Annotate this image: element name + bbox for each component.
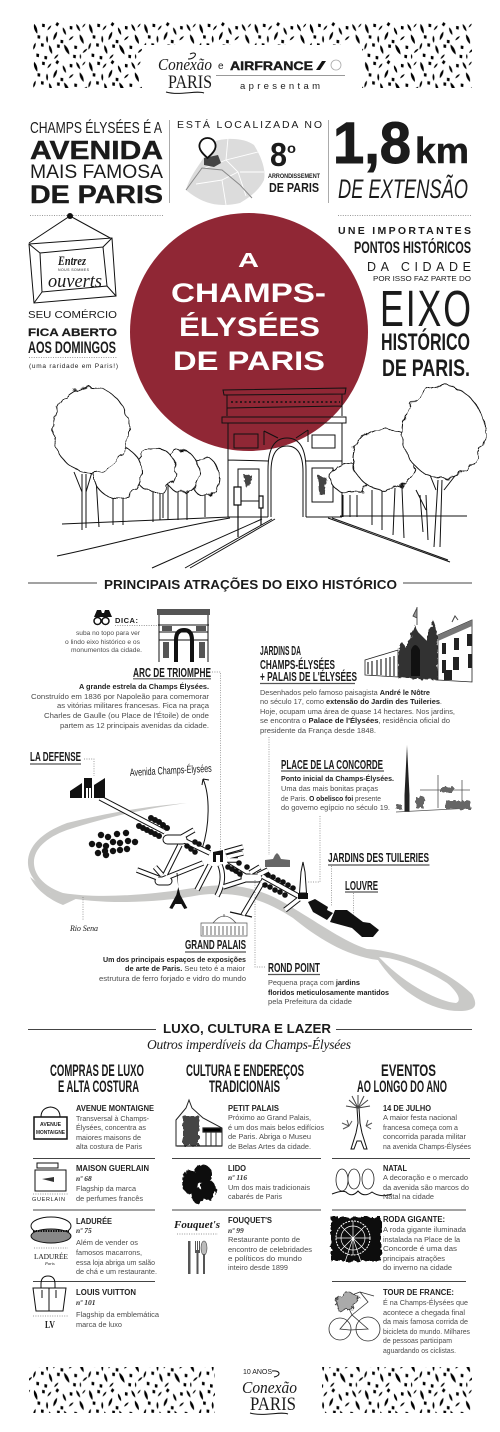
heading: Jardins des Tuileries: JARDINS DES TUILERIES xyxy=(328,850,429,865)
icon: hanging shop sign: NOUS SOMMES xyxy=(58,268,90,272)
heading xyxy=(357,1061,447,1096)
item: Louis Vuitton: Flagship da emblemática xyxy=(76,1310,160,1319)
text: comércio aos domingos xyxy=(28,308,118,370)
text: eixo histórico: DA CIDADE xyxy=(367,260,471,274)
title: CHAMPS- xyxy=(171,278,326,308)
stat: avenida mais famosa xyxy=(30,118,163,209)
title circle xyxy=(130,213,368,451)
column 1: compras de luxo xyxy=(31,1061,160,1331)
icon: Ladurée macaron: LADURÉE xyxy=(34,1251,68,1261)
heading: COMPRAS DE LUXO xyxy=(50,1061,144,1080)
heading: CULTURA E ENDEREÇOS xyxy=(186,1061,304,1080)
text: eixo histórico: DE PARIS. xyxy=(382,355,470,382)
text: Jardins da Champs-Élysées xyxy=(260,644,455,735)
text: Rond Point: ROND POINT xyxy=(268,960,320,975)
icon: hanging shop sign xyxy=(29,213,116,303)
item: Avenue Montaigne xyxy=(76,1104,154,1151)
text: Rond Point: Pequena praça com jardins xyxy=(268,978,360,987)
stat: localização 8º xyxy=(177,118,322,205)
lamp posts xyxy=(234,487,263,537)
icon: Fouquet's and cutlery xyxy=(173,1219,220,1274)
item: Louis Vuitton: nº 101 xyxy=(76,1298,96,1307)
text: Grand Palais: de arte de Paris. Seu teto é a maior xyxy=(125,964,245,973)
column 2: cultura e endereços xyxy=(172,1061,324,1274)
river label xyxy=(69,897,98,933)
text: Jardins da Champs-Élysées: no século 17, como extensão do Jardin des Tuileries. xyxy=(260,697,442,706)
item: Fouquet's: encontro de celebridades xyxy=(228,1245,312,1254)
icon: Ladurée macaron: Paris xyxy=(44,1261,55,1266)
text: Rond Point: floridos meticulosamente mantidos xyxy=(268,988,389,997)
tip: dica: DICA: xyxy=(115,616,138,625)
text: Grand Palais: Um dos principais espaços de exposições xyxy=(103,955,246,964)
item: Lido: Um dos mais tradicionais xyxy=(228,1183,310,1192)
horizon and ground lines xyxy=(57,516,467,568)
title: ÉLYSÉES xyxy=(179,311,320,342)
illustration: Grand Palais xyxy=(201,914,247,936)
stat: avenida mais famosa: CHAMPS ÉLYSÉES É A xyxy=(30,118,162,137)
item: Roda gigante: RODA GIGANTE: xyxy=(383,1215,445,1224)
icon: Eiffel tower xyxy=(169,873,187,909)
item: Tour de France: É na Champs-Élysées que xyxy=(383,1298,468,1307)
heading: Louvre xyxy=(345,879,378,893)
illustration: trees and Arc de Triomphe xyxy=(53,386,484,568)
item: Louis Vuitton: LOUIS VUITTON xyxy=(76,1288,136,1297)
text: Jardins da Champs-Élysées: + PALAIS DE L'ÉLYSÉES xyxy=(260,669,357,684)
text: Jardins da Champs-Élysées: presidente da França desde 1848. xyxy=(260,726,376,735)
item: Roda gigante: do inverno na cidade xyxy=(383,1263,452,1272)
text: Arc de Triomphe: Construído em 1836 por Napoleão para comemorar xyxy=(31,692,209,701)
section heading: luxo, cultura e lazer xyxy=(28,1022,472,1052)
icon: Louis Vuitton bag: LV xyxy=(45,1319,55,1331)
text: Arc de Triomphe xyxy=(31,665,211,730)
text: Place de la Concorde: do governo egípcio no século 19. xyxy=(281,803,390,812)
icon: hanging shop sign: Entrez xyxy=(57,253,87,268)
item: Lido xyxy=(228,1164,310,1201)
section heading: principais atrações: PRINCIPAIS ATRAÇÕES DO EIXO HISTÓRICO xyxy=(104,577,397,592)
heading: La Defense xyxy=(30,749,81,764)
icon: street sign: MONTAIGNE xyxy=(36,1130,65,1136)
stat: 1,8 km de extensão: 1,8 xyxy=(333,111,411,176)
item: Fouquet's: FOUQUET'S xyxy=(228,1216,272,1225)
stat: 1,8 km de extensão xyxy=(333,111,469,204)
item: Natal: NATAL xyxy=(383,1164,407,1173)
column 3: eventos xyxy=(329,1061,471,1355)
logo: Air France xyxy=(230,60,341,73)
item: 14 de Julho xyxy=(383,1104,471,1151)
text: eixo histórico: UNE IMPORTANTES xyxy=(338,225,471,237)
section heading: luxo, cultura e lazer: Outros imperdíveis da Champs-Élysées xyxy=(147,1037,351,1052)
item: Maison Guerlain: de perfumes francês xyxy=(76,1194,143,1203)
item: Fouquet's: nº 99 xyxy=(228,1226,244,1235)
item: Maison Guerlain: Flagship da marca xyxy=(76,1184,137,1193)
item: Ladurée: Além de vender os xyxy=(76,1238,138,1247)
item: Ladurée: LADURÉE xyxy=(76,1217,112,1226)
heading xyxy=(50,1061,144,1096)
icon: obelisk on map xyxy=(298,862,308,899)
item: Tour de France xyxy=(383,1288,470,1355)
heading: E ALTA COSTURA xyxy=(58,1077,139,1096)
icon: Arc on map xyxy=(213,850,223,862)
right trees xyxy=(330,386,484,547)
central pavilion xyxy=(398,620,438,680)
text: Grand Palais: estrutura de ferro forjado e vidro do mundo xyxy=(99,974,246,983)
item: Fouquet's: inteiro desde 1899 xyxy=(228,1263,288,1272)
text: Grand Palais xyxy=(99,937,246,983)
tip: dica: o lindo eixo histórico e os xyxy=(65,639,141,646)
icon: binoculars xyxy=(94,610,112,624)
item: Fouquet's xyxy=(228,1216,312,1272)
item: Natal: Natal na cidade xyxy=(383,1192,434,1201)
icon: Guerlain perfume: GUERLAIN xyxy=(32,1197,65,1203)
footer logo: Conexão xyxy=(242,1378,297,1397)
item: Ladurée: nº 75 xyxy=(76,1226,92,1235)
item: Fouquet's: Restaurante ponto de xyxy=(228,1235,300,1244)
item: Tour de France: de pessoas participam xyxy=(383,1336,452,1345)
item: Tour de France: da mais famosa corrida de xyxy=(383,1317,468,1326)
text: eixo histórico xyxy=(338,225,472,382)
header logos xyxy=(158,53,345,93)
Louvre xyxy=(308,899,379,937)
title: DE PARIS xyxy=(173,346,325,376)
text: Arc de Triomphe: as vitórias militares francesas. Fica na praça xyxy=(57,701,210,710)
illustration: obelisk and Place de la Concorde xyxy=(396,745,472,812)
map pin xyxy=(199,138,216,158)
icon: Eiffel tower with fireworks xyxy=(342,1095,372,1149)
text: Jardins da Champs-Élysées: Hoje, ocupam uma área de quase 14 hectares. Nos jardins, xyxy=(260,707,455,716)
stat: avenida mais famosa: DE PARIS xyxy=(30,181,163,209)
icon: Ladurée macaron xyxy=(31,1217,71,1266)
label: Avenida Champs-Élysées: Avenida Champs-Élysées xyxy=(129,762,212,779)
icon: Fouquet's and cutlery: Fouquet's xyxy=(173,1219,220,1231)
river label: Rio Sena xyxy=(69,924,98,933)
item: Ladurée xyxy=(76,1217,157,1276)
logo: Conexão Paris: PARIS xyxy=(168,72,212,93)
icon: La Defense towers xyxy=(70,778,105,798)
footer logo xyxy=(242,1369,297,1415)
text: Arc de Triomphe: Charles de Gaulle (ou Place de l'Étoile) de onde xyxy=(44,711,209,720)
tip: dica: monumentos da cidade. xyxy=(71,647,142,654)
header leaf pattern xyxy=(32,22,472,88)
text: Arc de Triomphe: ARC DE TRIOMPHE xyxy=(133,665,211,680)
item: Fouquet's: e políticos do mundo xyxy=(228,1254,302,1263)
text: eixo histórico: POR ISSO FAZ PARTE DO xyxy=(373,276,472,283)
text: Jardins da Champs-Élysées: se encontra o Palace de l'Élysées, residência oficial do xyxy=(260,716,450,725)
text: Grand Palais: GRAND PALAIS xyxy=(185,937,246,952)
item: Petit Palais: PETIT PALAIS xyxy=(228,1104,279,1113)
text: Place de la Concorde: Ponto inicial da Champs-Élysées. xyxy=(281,774,394,783)
heading: TRADICIONAIS xyxy=(209,1077,280,1096)
logo: Air France: AIRFRANCE xyxy=(230,61,313,73)
tree clusters xyxy=(89,815,296,898)
icon: small palace xyxy=(265,853,290,867)
item: Ladurée: de chá e um restaurante. xyxy=(76,1267,157,1276)
item: Natal: A decoração e o mercado xyxy=(383,1173,468,1182)
text: Rond Point xyxy=(268,960,389,1006)
text: comércio aos domingos: AOS DOMINGOS xyxy=(28,338,116,357)
rule and apresentam xyxy=(216,76,345,92)
stat: 1,8 km de extensão: km xyxy=(415,130,469,171)
item: Louis Vuitton: marca de luxo xyxy=(76,1320,122,1329)
text: e: e xyxy=(218,61,224,72)
item: Ladurée: famosos macarrons, xyxy=(76,1248,142,1257)
item: Lido: LIDO xyxy=(228,1164,246,1173)
footer leaf pattern xyxy=(29,1367,472,1413)
text: Jardins da Champs-Élysées: CHAMPS-ÉLYSÉES xyxy=(260,657,335,672)
item: Petit Palais: de Paris. Abriga o Museu xyxy=(228,1132,311,1141)
item: Petit Palais xyxy=(228,1104,324,1151)
icon: street sign: AVENUE xyxy=(40,1122,61,1128)
text: Place de la Concorde: Uma das mais bonitas praças xyxy=(281,784,378,793)
heading: Jardins des Tuileries xyxy=(328,850,430,865)
heading: La Defense: LA DEFENSE xyxy=(30,749,81,764)
right wing xyxy=(438,620,472,682)
text: Arc de Triomphe: A grande estrela da Champs Élysées. xyxy=(79,682,209,691)
text: Arc de Triomphe: partem as 12 principais avenidas da cidade. xyxy=(60,721,209,730)
text: comércio aos domingos: SEU COMÉRCIO xyxy=(28,308,117,321)
item: Tour de France: TOUR DE FRANCE: xyxy=(383,1288,454,1297)
footer logo: 10 ANOS xyxy=(243,1369,272,1376)
icon: Louis Vuitton bag xyxy=(33,1276,68,1331)
title: A xyxy=(238,250,259,272)
logo: Conexão Paris xyxy=(158,53,212,93)
item: Avenue Montaigne: alta costura de Paris xyxy=(76,1142,142,1151)
item: Avenue Montaigne: maiores maisons de xyxy=(76,1133,141,1142)
text: Place de la Concorde: de Paris. O obelisco foi presente xyxy=(281,794,381,803)
stat: localização 8º: ARRONDISSEMENT xyxy=(268,173,320,180)
item: Petit Palais: Próximo ao Grand Palais, xyxy=(228,1113,311,1122)
text: Place de la Concorde: PLACE DE LA CONCORDE xyxy=(281,757,383,772)
logo: Conexão Paris: Conexão xyxy=(158,55,212,74)
item: Lido: cabarés de Paris xyxy=(228,1192,282,1201)
river Seine xyxy=(28,803,475,1011)
icon: Guerlain perfume xyxy=(32,1163,68,1203)
item: Roda gigante: principais atrações xyxy=(383,1254,445,1263)
Arc de Triomphe xyxy=(222,388,346,537)
text: Jardins da Champs-Élysées: JARDINS DA xyxy=(260,644,301,658)
icon: Petit Palais xyxy=(176,1100,222,1146)
item: 14 de Julho: 14 DE JULHO xyxy=(383,1104,431,1113)
item: Avenue Montaigne: Élysées, concentra as xyxy=(76,1123,146,1132)
map: eixo histórico xyxy=(28,778,475,1011)
item: Petit Palais: é um dos mais belos edifícios xyxy=(228,1123,324,1132)
text: Jardins da Champs-Élysées: Desenhados pelo famoso paisagista André le Nôtre xyxy=(260,688,430,697)
item: 14 de Julho: concorrida parada militar xyxy=(383,1132,466,1141)
item: Tour de France: aguardando os ciclistas. xyxy=(383,1346,456,1355)
item: Tour de France: acontece a chegada final xyxy=(383,1308,465,1317)
item: Roda gigante: A roda gigante iluminada xyxy=(383,1225,467,1234)
item: Roda gigante: instalada na Place de la xyxy=(383,1235,461,1244)
item: Roda gigante xyxy=(383,1215,467,1272)
tip: dica xyxy=(65,610,157,654)
item: 14 de Julho: na avenida Champs-Élysées xyxy=(383,1142,471,1151)
illustration: Palais de l'Élysée xyxy=(365,607,472,682)
item: Maison Guerlain xyxy=(76,1164,149,1203)
text: eixo histórico: EIXO xyxy=(380,281,471,338)
text: comércio aos domingos: FICA ABERTO xyxy=(28,327,118,339)
icon: street sign xyxy=(34,1107,67,1139)
heading: Louvre: LOUVRE xyxy=(345,879,378,893)
illustration: small arc xyxy=(157,609,210,662)
icon: Lido cabaret xyxy=(182,1165,216,1204)
stat: localização 8º: DE PARIS xyxy=(269,180,319,195)
arrow: avenida pointer xyxy=(202,779,209,849)
section heading: luxo, cultura e lazer: LUXO, CULTURA E LAZER xyxy=(163,1022,331,1036)
item: Avenue Montaigne: Transversal à Champs- xyxy=(76,1114,149,1123)
rule and apresentam: apresentam xyxy=(240,81,320,92)
item: Maison Guerlain: nº 68 xyxy=(76,1174,92,1183)
roads xyxy=(100,798,300,917)
left wing xyxy=(365,650,398,677)
icon: cyclist xyxy=(329,1292,380,1341)
heading xyxy=(186,1061,304,1096)
item: Lido: nº 116 xyxy=(228,1173,247,1182)
stat: localização 8º: 8 xyxy=(270,136,287,173)
icon: Christmas lights xyxy=(332,1169,392,1196)
stat: avenida mais famosa: MAIS FAMOSA xyxy=(30,162,163,183)
stat: avenida mais famosa: AVENIDA xyxy=(30,135,163,165)
item: Natal xyxy=(383,1164,469,1201)
footer logo: PARIS xyxy=(250,1394,296,1415)
title xyxy=(171,250,326,376)
item: Tour de France: bicicleta do mundo. Milhares xyxy=(383,1327,470,1336)
icon: ferris wheel xyxy=(331,1217,381,1262)
text: comércio aos domingos: (uma raridade em Paris!) xyxy=(29,363,118,370)
stat: localização 8º: ESTÁ LOCALIZADA NO xyxy=(177,118,322,131)
item: 14 de Julho: A maior festa nacional xyxy=(383,1113,457,1122)
item: Ladurée: essa loja abriga um salão xyxy=(76,1258,155,1267)
left trees xyxy=(53,387,220,530)
heading: EVENTOS xyxy=(381,1061,436,1080)
text: Rond Point: pela Prefeitura da cidade xyxy=(268,997,352,1006)
map of Paris xyxy=(186,138,265,205)
item: Avenue Montaigne: AVENUE MONTAIGNE xyxy=(76,1104,154,1113)
text: Place de la Concorde xyxy=(281,757,394,812)
item: Petit Palais: de Belas Artes da cidade. xyxy=(228,1142,311,1151)
stat: localização 8º: o xyxy=(287,140,296,156)
item: Natal: da avenida são marcos do xyxy=(383,1183,469,1192)
icon: hanging shop sign: ouverts xyxy=(48,271,102,292)
item: Roda gigante: Concorde é uma das xyxy=(383,1244,457,1253)
item: 14 de Julho: francesa começa com a xyxy=(383,1123,459,1132)
item: Maison Guerlain: MAISON GUERLAIN xyxy=(76,1164,149,1173)
tip: dica: suba no topo para ver xyxy=(76,630,141,637)
item: Louis Vuitton xyxy=(76,1288,160,1329)
